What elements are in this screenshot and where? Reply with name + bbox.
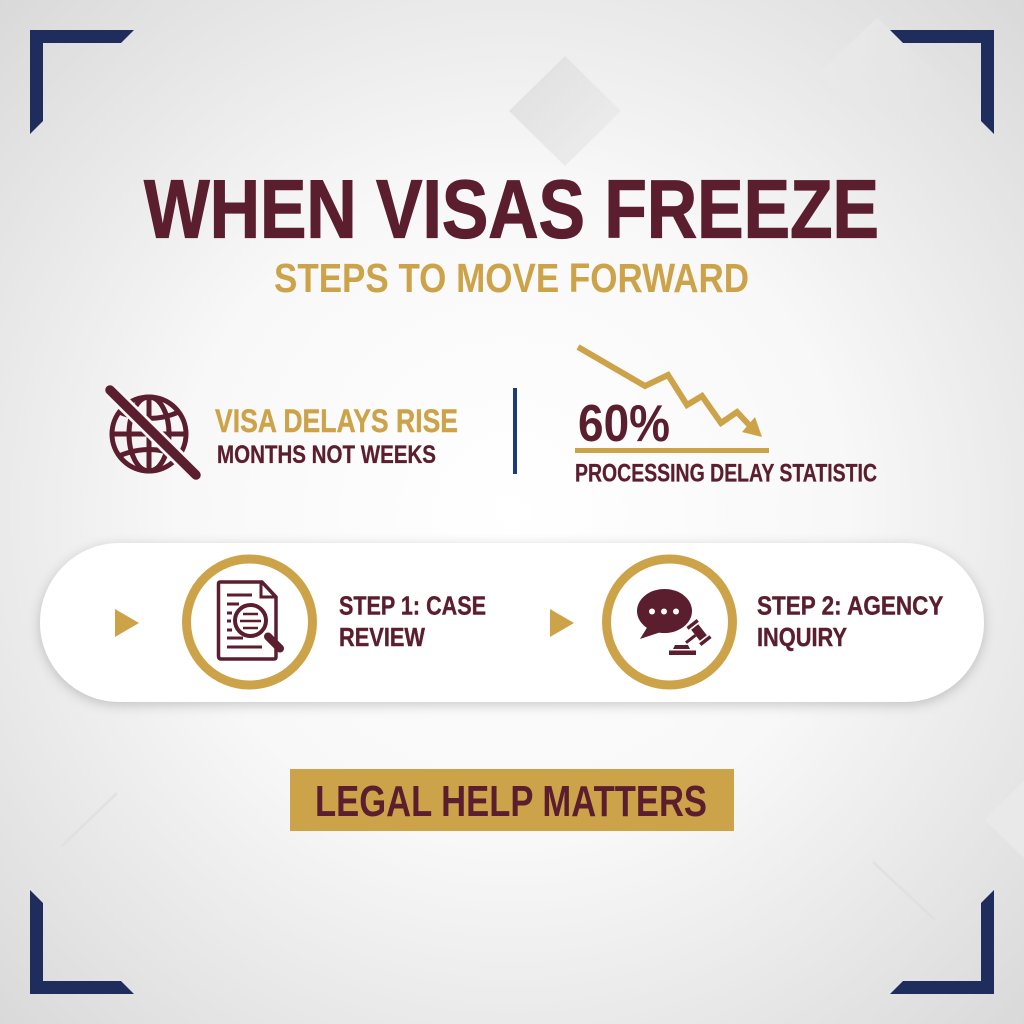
icon: step 2 speech bubble and gavel (606, 559, 732, 685)
icon: crossed-out globe (110, 390, 196, 475)
icon: step 1 document with magnifier (186, 559, 312, 685)
pill background (40, 543, 984, 702)
heading: visa delays rise: VISA DELAYS RISE (215, 403, 458, 439)
title: WHEN VISAS FREEZE (144, 162, 879, 256)
corner bracket: top left (30, 30, 134, 134)
callout: legal help matters: LEGAL HELP MATTERS (315, 777, 707, 826)
corner bracket: bottom left (30, 890, 134, 994)
chart: falling trend arrow (578, 347, 762, 437)
stat: 60%: 60% (578, 395, 670, 453)
text: step 1: REVIEW (339, 622, 425, 652)
subtitle: STEPS TO MOVE FORWARD (274, 255, 749, 301)
stat label: PROCESSING DELAY STATISTIC (575, 460, 877, 488)
arrow: step 2 (550, 609, 574, 637)
stat underline (575, 448, 769, 453)
callout: legal help matters (290, 769, 734, 831)
text: step 2: INQUIRY (757, 622, 847, 652)
arrow: step 1 (115, 609, 139, 637)
corner bracket: top right (890, 30, 994, 134)
text: months not weeks: MONTHS NOT WEEKS (217, 441, 436, 469)
decorative diamond (509, 56, 621, 166)
text: step 1: STEP 1: CASE (339, 590, 486, 620)
panel: steps pill (40, 543, 984, 702)
corner bracket: bottom right (890, 890, 994, 994)
vertical separator (513, 388, 517, 474)
text: step 2: STEP 2: AGENCY (757, 590, 943, 620)
